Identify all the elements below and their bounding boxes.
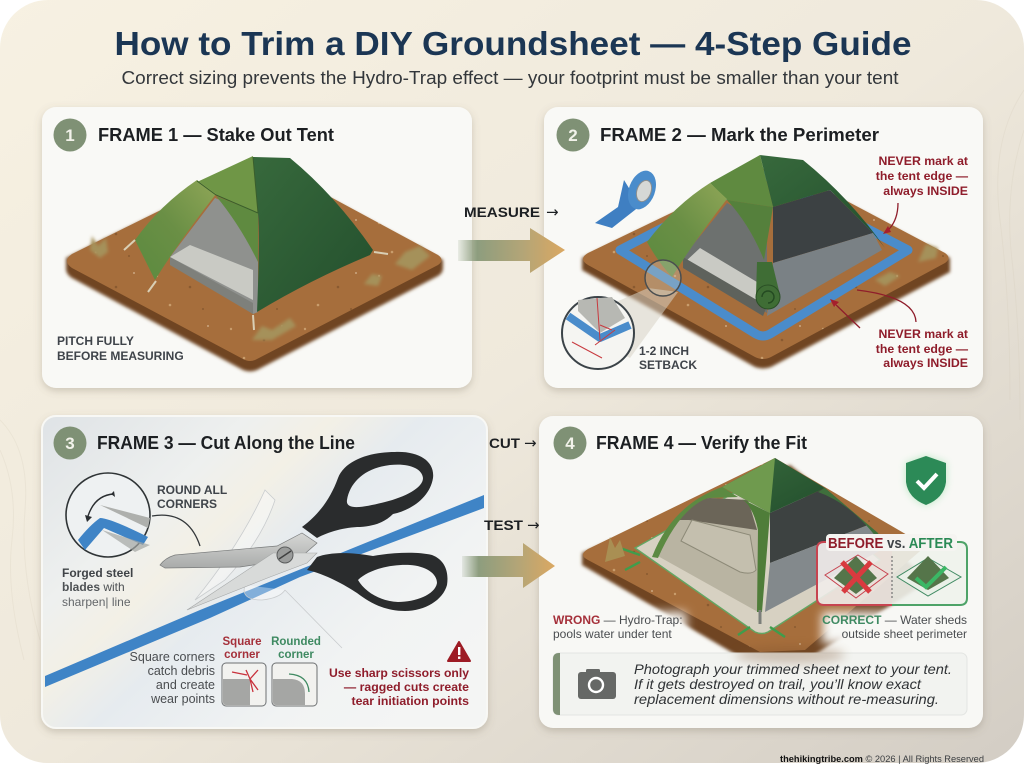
step badge 4: 4 xyxy=(565,434,575,453)
blue tape line xyxy=(45,495,484,687)
scissors xyxy=(160,452,447,611)
step badge 1: 1 xyxy=(65,126,75,145)
square corner note: Square corners xyxy=(130,650,215,664)
panel 2: mark the perimeter xyxy=(544,107,983,388)
wrong label xyxy=(553,613,683,641)
heading 3: FRAME 3 — Cut Along the Line xyxy=(97,433,355,453)
warning text xyxy=(329,666,469,708)
arrow: test: → xyxy=(527,516,540,534)
panel 1: stake out tent xyxy=(42,107,472,388)
rounded corner diagram: Rounded xyxy=(271,636,321,648)
step badge 2 xyxy=(556,118,590,152)
camera icon xyxy=(578,669,616,699)
arrow: test: TEST xyxy=(484,517,523,533)
subtitle: Correct sizing prevents the Hydro-Trap effect — your footprint must be smaller than your tent xyxy=(122,68,898,88)
blades note: Forged steel xyxy=(62,566,133,580)
arrow: measure xyxy=(458,203,565,273)
tip text xyxy=(634,661,952,707)
setback detail inset xyxy=(562,297,634,369)
warning callout bottom: NEVER mark at xyxy=(878,327,968,341)
warning callout top xyxy=(876,154,969,234)
label: pitch fully xyxy=(57,334,184,363)
warning icon xyxy=(448,642,470,661)
arrow: measure: → xyxy=(546,203,559,221)
step badge 3: 3 xyxy=(65,434,75,453)
clear sheet offcuts xyxy=(195,490,342,648)
label: cut: → xyxy=(524,434,537,452)
wrong label: pools water under tent xyxy=(553,627,672,641)
tent xyxy=(652,458,885,624)
square corner note: catch debris xyxy=(148,664,215,678)
heading 4: FRAME 4 — Verify the Fit xyxy=(596,433,807,453)
footer credit: thehikingtribe.com © 2026 | All Rights Reserved xyxy=(780,754,984,765)
arrow: test xyxy=(462,516,555,588)
warning callout bottom: always INSIDE xyxy=(883,356,968,370)
square corner diagram: corner xyxy=(224,649,260,661)
warning text: — ragged cuts create xyxy=(344,680,469,694)
correct label: outside sheet perimeter xyxy=(842,627,967,641)
tip text: replacement dimensions without re-measuring. xyxy=(634,691,939,707)
panel 3: cut along the line xyxy=(42,416,487,728)
warning text: Use sharp scissors only xyxy=(329,666,469,680)
title: How to Trim a DIY Groundsheet — 4-Step Guide xyxy=(114,25,912,62)
label: pitch fully: PITCH FULLY xyxy=(57,334,134,348)
label: cut: CUT xyxy=(489,435,520,451)
magnifier ring xyxy=(566,260,681,358)
label: setback: 1-2 INCH xyxy=(639,344,689,358)
step badge 2: 2 xyxy=(568,126,578,145)
square corner diagram xyxy=(222,636,266,706)
step badge 3 xyxy=(54,426,86,460)
curved pointer xyxy=(152,515,200,546)
panel 4: verify the fit xyxy=(539,416,983,728)
label: setback xyxy=(639,344,697,372)
warning text: tear initiation points xyxy=(351,694,469,708)
heading 1: FRAME 1 — Stake Out Tent xyxy=(98,125,334,145)
tape roll xyxy=(595,167,661,228)
arrow: measure: MEASURE xyxy=(464,204,540,220)
label: cut xyxy=(489,434,537,452)
shield badge xyxy=(906,456,946,505)
label: round all corners: ROUND ALL xyxy=(157,483,227,497)
step badge 1 xyxy=(54,118,86,152)
label: pitch fully: BEFORE MEASURING xyxy=(57,349,184,363)
tent xyxy=(647,155,885,316)
blue tape perimeter xyxy=(620,175,908,336)
warning callout top: always INSIDE xyxy=(883,184,968,198)
blades note xyxy=(62,566,133,609)
blades note: blades with xyxy=(62,580,125,594)
correct label: CORRECT — Water sheds xyxy=(822,613,967,627)
ground shadow on callout xyxy=(735,646,845,664)
heading 2: FRAME 2 — Mark the Perimeter xyxy=(600,125,879,145)
before vs after comparison: BEFORE vs. AFTER xyxy=(828,536,953,552)
correct label xyxy=(822,613,967,641)
label backing fades xyxy=(546,612,972,644)
photo tip callout xyxy=(553,646,967,715)
square corner note: and create xyxy=(156,678,215,692)
wrong label: WRONG — Hydro-Trap: xyxy=(553,613,683,627)
square corner note xyxy=(130,650,215,706)
step badge 4 xyxy=(554,426,586,460)
label: round all corners: CORNERS xyxy=(157,497,217,511)
square corner diagram: Square xyxy=(222,636,262,648)
dirt ground platform xyxy=(582,163,950,368)
warning callout bottom xyxy=(830,290,969,370)
detail inset: round corners xyxy=(66,473,150,557)
label: setback: SETBACK xyxy=(639,358,697,372)
rounded corner diagram xyxy=(271,636,321,706)
ground with trimmed sheet xyxy=(582,458,930,664)
square corner note: wear points xyxy=(150,692,215,706)
warning callout top: the tent edge — xyxy=(876,169,969,183)
tent xyxy=(124,156,388,330)
label: round all corners xyxy=(157,483,227,511)
tip text: If it gets destroyed on trail, you’ll know exact xyxy=(634,676,922,692)
before vs after comparison xyxy=(817,534,967,605)
warning callout bottom: the tent edge — xyxy=(876,342,969,356)
rounded corner diagram: corner xyxy=(278,649,314,661)
tip text: Photograph your trimmed sheet next to your tent. xyxy=(634,661,952,677)
warning callout top: NEVER mark at xyxy=(878,154,968,168)
blades note: sharpen| line xyxy=(62,595,131,609)
dirt ground platform xyxy=(66,160,443,372)
